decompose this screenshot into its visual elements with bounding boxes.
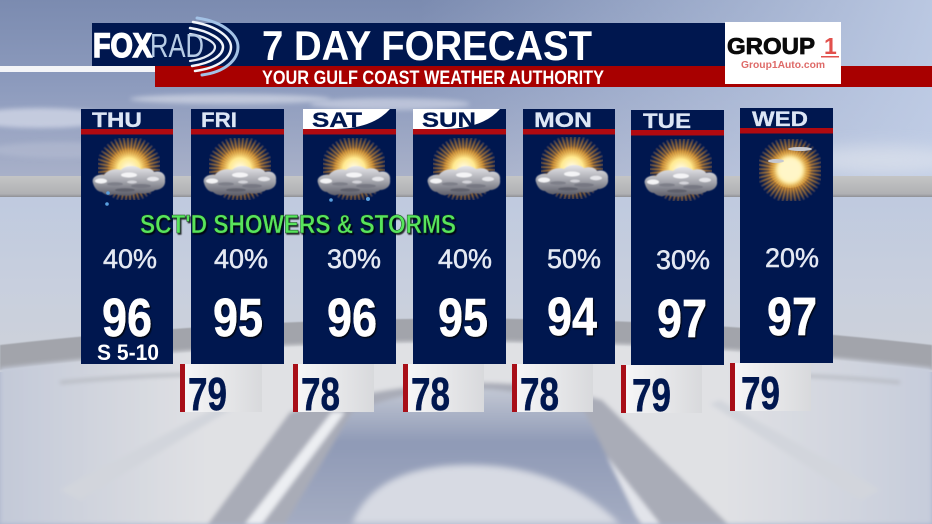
panel: Thursday: [81, 109, 173, 365]
header navy title bar: [92, 23, 732, 66]
panel: Friday: 95: [213, 288, 263, 348]
panel: Thursday: 96: [102, 288, 152, 348]
low temperature: Tuesday 79: [621, 365, 702, 421]
low temperature: Wednesday 79: [730, 363, 811, 419]
panel: Sunday: 40%: [438, 244, 492, 274]
panel: Wednesday: 97: [767, 287, 817, 347]
low temperature: Monday 78: 78: [520, 368, 559, 420]
logo: FOX RAD: RAD: [150, 27, 204, 64]
title: 7 DAY FORECAST: [262, 22, 592, 69]
low temperature: Sunday 78: 78: [411, 368, 450, 420]
panel: Monday: 94: [547, 287, 597, 347]
panel: Tuesday: TUE: [643, 110, 691, 133]
forecast summary label: SCT'D SHOWERS & STORMS: [140, 209, 456, 239]
panel: Wednesday: WED: [752, 108, 808, 131]
panel: Thursday: THU: [92, 109, 142, 132]
panel: Tuesday: 30%: [656, 245, 710, 275]
panel: Thursday: S 5-10: [97, 340, 159, 365]
panel: Monday: [523, 109, 615, 364]
low temperature: Sunday 78: [403, 364, 484, 420]
panel: Tuesday: 97: [657, 289, 707, 349]
panel: Friday: FRI: [201, 109, 237, 132]
sponsor logo: Group 1: GROUP: [727, 33, 815, 59]
panel: Saturday: SAT: [312, 109, 362, 132]
header white rule: [0, 66, 160, 72]
tagline: YOUR GULF COAST WEATHER AUTHORITY: [262, 67, 604, 89]
panel: Monday: 50%: [547, 244, 601, 274]
low temperature: Tuesday 79: 79: [632, 369, 671, 421]
panel: Saturday: 30%: [327, 244, 381, 274]
sponsor logo: Group 1: [725, 22, 841, 84]
logo: FOX RAD: FOX: [93, 27, 152, 65]
logo: FOX RAD: [93, 18, 238, 75]
low temperature: Friday 79: [180, 364, 262, 420]
panel: Wednesday: 20%: [765, 243, 819, 273]
low temperature: Wednesday 79: 79: [741, 367, 780, 419]
sponsor logo: Group 1: Group1Auto.com: [741, 59, 825, 71]
sponsor logo: Group 1: 1: [824, 33, 837, 59]
panel: Sunday: 95: [438, 288, 488, 348]
panel: Wednesday: [740, 108, 833, 363]
panel: Friday: 40%: [214, 244, 268, 274]
panel: Monday: MON: [534, 109, 592, 132]
panel: Saturday: 96: [327, 288, 377, 348]
panel: Sunday: [413, 109, 506, 364]
panel: Thursday: 40%: [103, 244, 157, 274]
low temperature: Friday 79: 79: [188, 368, 227, 420]
low temperature: Saturday 78: 78: [301, 368, 340, 420]
low temperature: Monday 78: [512, 364, 593, 420]
panel: Sunday: SUN: [422, 109, 476, 132]
low temperature: Saturday 78: [293, 364, 374, 420]
header red tagline bar: [155, 66, 932, 87]
panel: Tuesday: [631, 110, 724, 365]
panel: Friday: [191, 109, 284, 364]
panel: Saturday: [303, 109, 396, 364]
